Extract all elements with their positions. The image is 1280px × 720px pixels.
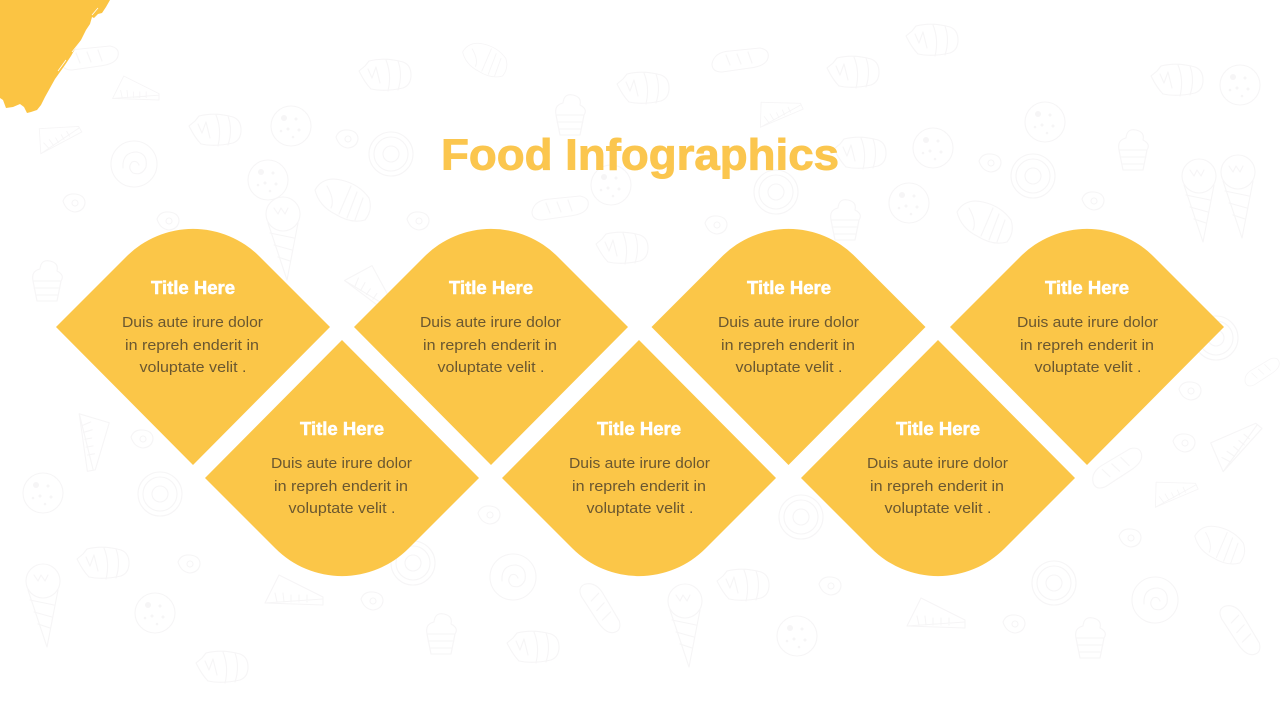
card 2: Title Here xyxy=(300,419,384,439)
card 2: Duis aute irure dolor xyxy=(271,455,412,472)
card 5: voluptate velit . xyxy=(736,359,842,376)
card 7: Duis aute irure dolor xyxy=(1017,314,1158,331)
card 3: Duis aute irure dolor xyxy=(420,314,561,331)
title: Food Infographics xyxy=(441,130,839,180)
card 4: Duis aute irure dolor xyxy=(569,455,710,472)
card 4: Title Here xyxy=(597,419,681,439)
card 5 xyxy=(652,229,926,465)
card 1: Title Here xyxy=(151,278,235,298)
card 5: Duis aute irure dolor xyxy=(718,314,859,331)
card 6: in repreh enderit in xyxy=(870,478,1004,495)
card 1: voluptate velit . xyxy=(140,359,246,376)
card 2: in repreh enderit in xyxy=(274,478,408,495)
card 2 xyxy=(205,340,479,576)
card 6: Title Here xyxy=(896,419,980,439)
card 5: in repreh enderit in xyxy=(721,337,855,354)
card 3: in repreh enderit in xyxy=(423,337,557,354)
card 7: Title Here xyxy=(1045,278,1129,298)
card 1: Duis aute irure dolor xyxy=(122,314,263,331)
card 7: voluptate velit . xyxy=(1034,359,1142,376)
card 6: Duis aute irure dolor xyxy=(867,455,1008,472)
card 5: Title Here xyxy=(747,278,831,298)
card 6: voluptate velit . xyxy=(884,500,992,517)
card 4 xyxy=(502,340,776,576)
card 3: Title Here xyxy=(449,278,533,298)
card 1 xyxy=(56,229,330,465)
card 7 xyxy=(950,229,1224,465)
card 2: voluptate velit . xyxy=(288,500,396,517)
yellow paint brush stroke corner xyxy=(0,0,110,113)
card 7: in repreh enderit in xyxy=(1020,337,1154,354)
card 3 xyxy=(354,229,628,465)
card 3: voluptate velit . xyxy=(438,359,544,376)
card 4: in repreh enderit in xyxy=(572,478,706,495)
card 1: in repreh enderit in xyxy=(125,337,259,354)
card 6 xyxy=(801,340,1075,576)
card 4: voluptate velit . xyxy=(586,500,694,517)
